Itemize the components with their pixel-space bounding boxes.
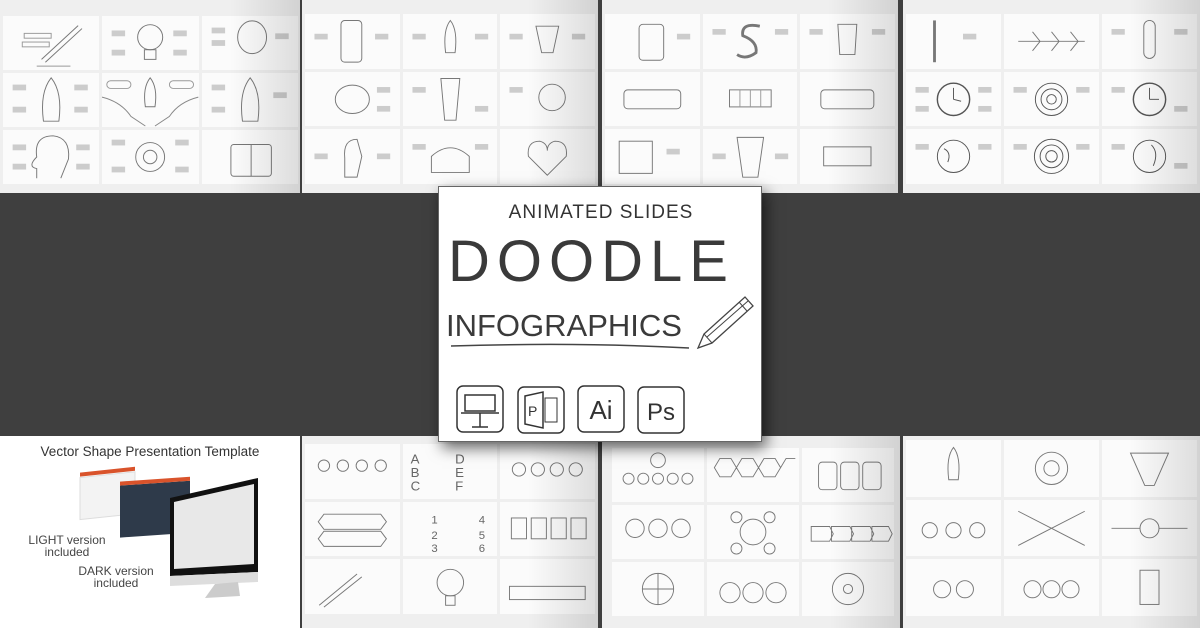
icon: keynote bbox=[456, 385, 504, 433]
panel: bottom screenshot 2 bbox=[302, 436, 598, 628]
panel: bottom screenshot 2: 6 bbox=[478, 543, 485, 555]
text: dark version: included bbox=[94, 576, 138, 590]
panel: bottom screenshot 2: E bbox=[455, 465, 464, 480]
icon: photoshop: Ps bbox=[647, 399, 675, 426]
panel: bottom screenshot 4 bbox=[903, 436, 1200, 628]
panel: bottom screenshot 2: 5 bbox=[478, 529, 485, 541]
icon: powerpoint bbox=[517, 386, 565, 434]
panel: vector shape presentation template bbox=[0, 436, 300, 628]
panel: bottom screenshot 2: B bbox=[410, 465, 419, 480]
text: light version: LIGHT version bbox=[28, 533, 106, 547]
panel: bottom screenshot 2: 2 bbox=[431, 529, 437, 541]
icon: illustrator bbox=[577, 385, 625, 433]
icon: powerpoint: P bbox=[528, 403, 537, 419]
panel: bottom screenshot 2: A bbox=[410, 452, 419, 467]
icon: illustrator: Ai bbox=[589, 395, 613, 425]
text: dark version: DARK version bbox=[78, 564, 154, 578]
panel: bottom screenshot 2: 1 bbox=[431, 514, 437, 526]
panel: bottom screenshot 2: 4 bbox=[478, 514, 485, 526]
panel: bottom screenshot 2: D bbox=[455, 452, 464, 467]
text: light version bbox=[28, 533, 106, 559]
text: light version: included bbox=[45, 545, 89, 559]
panel: bottom screenshot 2: 3 bbox=[431, 543, 437, 555]
heading: infographics: INFOGRAPHICS bbox=[446, 308, 682, 343]
panel: top screenshot 2 bbox=[302, 0, 598, 193]
icon: pencil and underline bbox=[451, 296, 754, 350]
panel: bottom screenshot 2: C bbox=[410, 478, 420, 493]
heading: doodle: DOODLE bbox=[448, 229, 735, 294]
panel: bottom screenshot 3 bbox=[602, 436, 900, 628]
panel: central title card bbox=[438, 186, 762, 442]
text: dark version bbox=[78, 564, 154, 590]
panel: bottom screenshot 2: F bbox=[455, 478, 463, 493]
heading: template title: Vector Shape Presentation Template bbox=[41, 444, 259, 459]
panel: top screenshot 4 bbox=[903, 0, 1200, 193]
panel: top screenshot 3 bbox=[602, 0, 898, 193]
illustration: monitor with slides bbox=[80, 466, 258, 598]
heading: animated slides: ANIMATED SLIDES bbox=[509, 202, 693, 223]
icon: photoshop bbox=[637, 386, 685, 434]
panel: top screenshot 1 bbox=[0, 0, 300, 193]
